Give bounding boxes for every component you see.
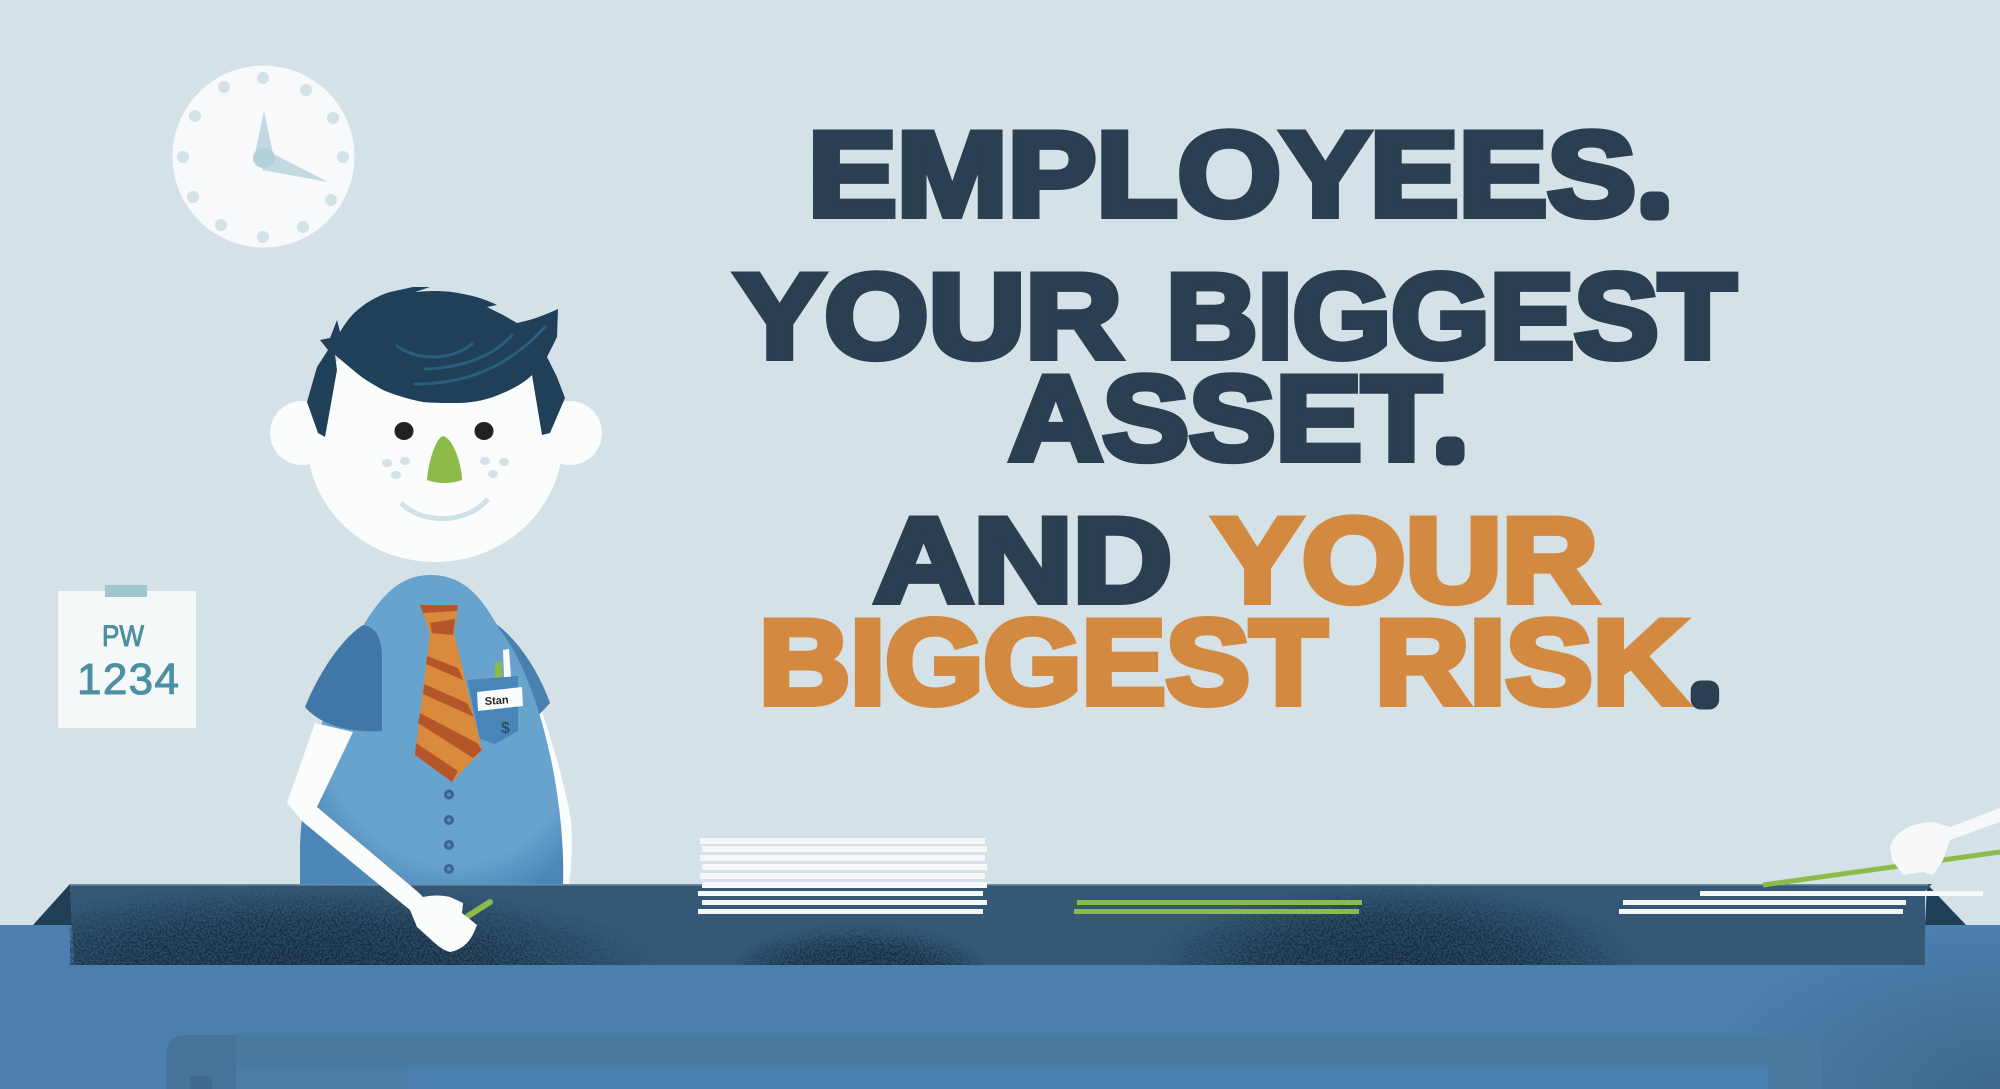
headline line: Employees: . <box>1646 157 1663 224</box>
desk <box>0 883 2000 1089</box>
headline line: Biggest risk: . <box>1697 646 1713 713</box>
headline line: And your: YOUR <box>1213 494 1598 628</box>
desk side triangles <box>33 884 1966 925</box>
white papers right <box>1619 891 1983 914</box>
torso <box>300 575 563 884</box>
hair <box>307 287 565 437</box>
desk recess <box>70 884 1932 965</box>
shirt buttons <box>446 791 452 872</box>
sticky note with password: PW <box>102 620 145 653</box>
green papers <box>1074 900 1362 914</box>
shirt pocket with pens and name badge <box>467 649 523 744</box>
icon: wall clock <box>172 66 354 248</box>
left sleeve <box>305 625 382 731</box>
right sleeve <box>492 621 550 717</box>
headline line: And your <box>874 494 1598 628</box>
keyboard tray <box>166 1035 1823 1089</box>
character: Stan <box>270 287 602 886</box>
paper stack <box>698 838 987 914</box>
name badge: Stan <box>484 694 509 708</box>
headline line: And your: AND <box>874 494 1172 628</box>
headline line: Your biggest: YOUR <box>735 250 1122 384</box>
tie <box>415 605 482 782</box>
desk grain shadows <box>70 888 1630 965</box>
right arm outline <box>533 712 572 886</box>
headline line: Asset: . <box>1442 402 1459 469</box>
headline <box>735 108 1736 730</box>
headline line: Biggest risk: BIGGEST <box>759 596 1327 730</box>
headline line: Biggest risk: RISK <box>1375 596 1687 730</box>
right hand with pencil <box>1763 808 2000 885</box>
left arm with hand and pencil <box>287 723 490 952</box>
head with face <box>270 287 602 562</box>
sticky note with password: 1234 <box>77 655 179 704</box>
headline line: Asset: ASSET <box>1009 352 1441 486</box>
headline line: Employees: EMPLOYEES <box>808 108 1636 242</box>
headline line: Your biggest <box>735 250 1736 384</box>
headline line: Biggest risk <box>759 596 1713 730</box>
desk front <box>0 925 2000 1089</box>
headline line: Your biggest: BIGGEST <box>1166 250 1736 384</box>
shirt pocket with pens and name badge: $ <box>501 720 510 737</box>
sticky note with password <box>58 585 196 728</box>
